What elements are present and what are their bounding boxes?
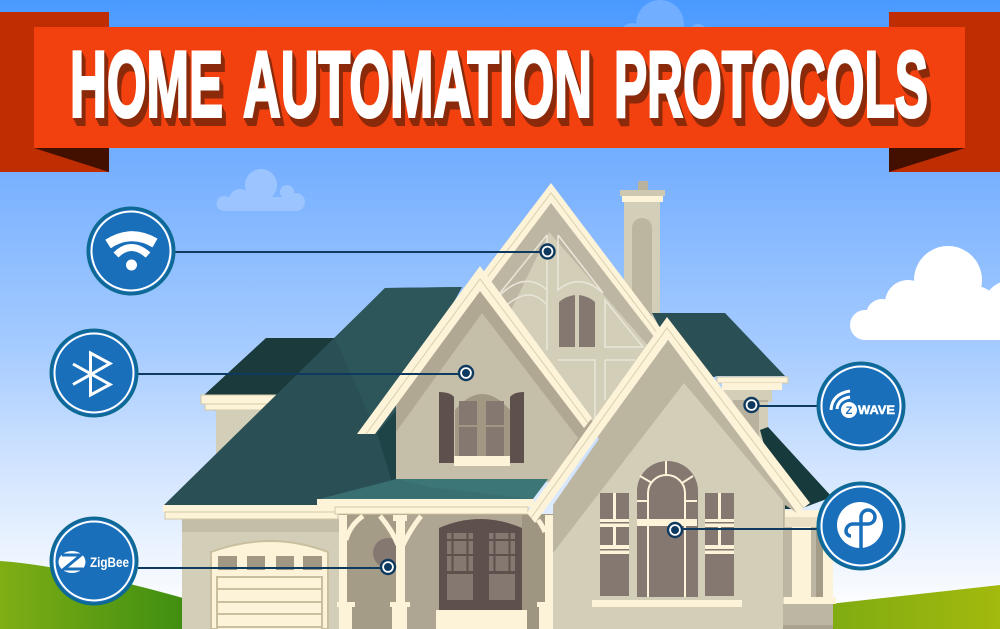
banner ribbon xyxy=(0,12,1000,172)
garage panels xyxy=(217,577,322,629)
title: AUTOMATION xyxy=(243,32,592,136)
right ribbon tail xyxy=(889,12,1000,172)
right cornice and side wall xyxy=(717,377,788,445)
badge: bluetooth xyxy=(51,330,137,416)
icon: thread logo xyxy=(837,502,883,548)
garage windows xyxy=(218,556,322,570)
window panes xyxy=(459,401,504,457)
chimney xyxy=(620,181,665,330)
back left roof xyxy=(203,338,340,420)
badge: z-wave xyxy=(818,363,904,449)
cloud: left light blue xyxy=(216,169,305,211)
front door xyxy=(436,519,527,629)
front window sill xyxy=(592,600,742,607)
icon: bluetooth xyxy=(73,353,110,395)
icon: z-wave arcs xyxy=(831,391,857,418)
connector lines xyxy=(138,252,818,568)
right fold xyxy=(889,148,965,172)
main teal roof xyxy=(164,287,462,505)
upper gable wall xyxy=(470,203,665,440)
cloud: right white xyxy=(850,246,1000,340)
upper gable trim xyxy=(462,183,662,338)
hill: right xyxy=(820,585,1000,629)
front right side window xyxy=(705,493,734,596)
porch step xyxy=(436,610,527,629)
right upper roof xyxy=(652,313,785,385)
marker dots xyxy=(381,244,758,574)
porch cornice xyxy=(317,499,534,514)
roof shadow xyxy=(377,410,397,482)
middle gable wall xyxy=(396,291,600,482)
icon: wifi xyxy=(108,236,155,270)
porch roof xyxy=(320,479,548,499)
middle gable window xyxy=(439,392,524,466)
front gable trim xyxy=(527,317,810,523)
window sill xyxy=(454,456,510,466)
banner body xyxy=(34,27,965,148)
middle gable light wall xyxy=(396,313,578,482)
window frame xyxy=(455,394,510,456)
upper gable timber lines xyxy=(499,235,643,420)
garage door xyxy=(211,541,328,629)
left shutter xyxy=(439,392,454,463)
cloud: behind banner xyxy=(621,0,707,48)
garage wall xyxy=(182,519,339,629)
front gable wall xyxy=(553,340,797,629)
left ribbon tail xyxy=(0,12,109,172)
right shutter xyxy=(510,392,524,463)
porch interior xyxy=(339,514,553,629)
roof facet xyxy=(335,287,462,433)
back left cornice xyxy=(201,395,279,455)
front gable light wall xyxy=(553,383,783,629)
porch posts xyxy=(337,515,554,629)
upper gable window xyxy=(559,295,595,347)
badge: wifi xyxy=(88,208,174,294)
porch round window xyxy=(373,538,403,568)
right side porch xyxy=(783,510,836,629)
upper gable light wall xyxy=(510,232,650,430)
house illustration xyxy=(163,181,836,629)
icon: zigbee logo xyxy=(58,551,86,573)
badge: zigbee xyxy=(51,518,137,604)
right lower dark roof xyxy=(760,427,832,509)
door muntins xyxy=(447,533,515,571)
middle gable trim xyxy=(357,266,592,434)
title: HOME xyxy=(70,32,223,136)
front left side window xyxy=(600,493,629,596)
z-wave wordmark: WAVE xyxy=(858,403,895,417)
z-wave logo letter: Z xyxy=(846,405,853,417)
badge: thread xyxy=(818,483,904,569)
door panes xyxy=(447,533,515,600)
front arched window xyxy=(637,461,698,597)
zigbee wordmark: ZigBee xyxy=(90,555,129,570)
garage cornice xyxy=(163,505,338,519)
hill: left xyxy=(0,561,190,629)
left fold xyxy=(34,148,109,172)
